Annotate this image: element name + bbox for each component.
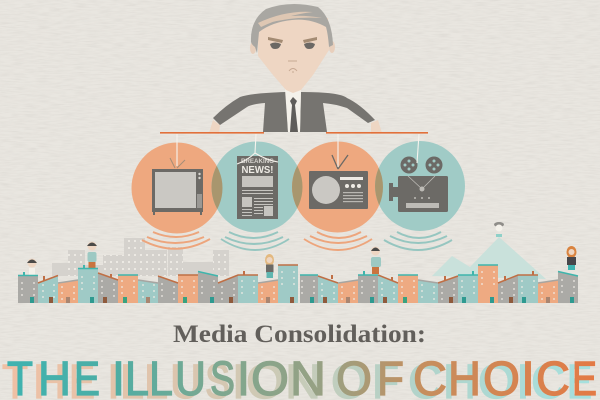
title front <box>7 353 597 400</box>
doors <box>30 297 574 303</box>
subtitle: Media Consolidation: <box>173 321 426 348</box>
row of houses <box>18 265 578 303</box>
mountains <box>432 237 546 279</box>
title shadow <box>2 356 592 400</box>
person: man in teal on roof <box>87 242 97 269</box>
circle overlap <box>212 166 222 209</box>
icon: newspaper: BREAKING <box>241 159 274 165</box>
hands <box>209 120 382 134</box>
hair highlights <box>258 12 322 27</box>
windows <box>21 271 575 300</box>
title <box>2 353 597 400</box>
person on mountain top <box>494 222 504 237</box>
broadcast waves: radio <box>304 232 372 250</box>
broadcast waves: newspaper <box>221 232 289 250</box>
icon: newspaper <box>237 156 278 219</box>
circle overlap <box>375 168 383 205</box>
ears <box>250 41 335 54</box>
icon: television <box>152 158 203 215</box>
broadcast waves: film camera <box>384 232 452 250</box>
panel: radio circle <box>292 142 380 232</box>
chimneys <box>23 265 474 276</box>
control bar <box>160 132 428 134</box>
person: blonde woman <box>265 254 274 278</box>
icon: film camera <box>389 156 448 212</box>
circle overlap <box>292 166 302 208</box>
grey city skyline <box>52 238 229 276</box>
brows and eyes <box>268 37 317 49</box>
person: red-haired woman <box>566 246 576 270</box>
person: man in teal, right <box>371 246 381 274</box>
broadcast waves: TV <box>142 232 210 249</box>
icon: newspaper: NEWS! <box>242 165 274 176</box>
shirt <box>285 89 301 132</box>
panel: TV circle <box>132 142 222 234</box>
nose and mouth <box>288 61 297 73</box>
man: puppet master <box>209 4 382 134</box>
person: boy on left roof <box>27 258 37 275</box>
hair <box>251 4 333 53</box>
tie <box>290 97 298 132</box>
panel: newspaper circle <box>212 142 302 232</box>
icon: radio <box>309 155 368 209</box>
puppet strings <box>177 134 419 167</box>
roofs <box>18 265 578 283</box>
suit <box>213 92 375 132</box>
panel: film camera circle <box>375 141 465 231</box>
head <box>258 18 329 93</box>
